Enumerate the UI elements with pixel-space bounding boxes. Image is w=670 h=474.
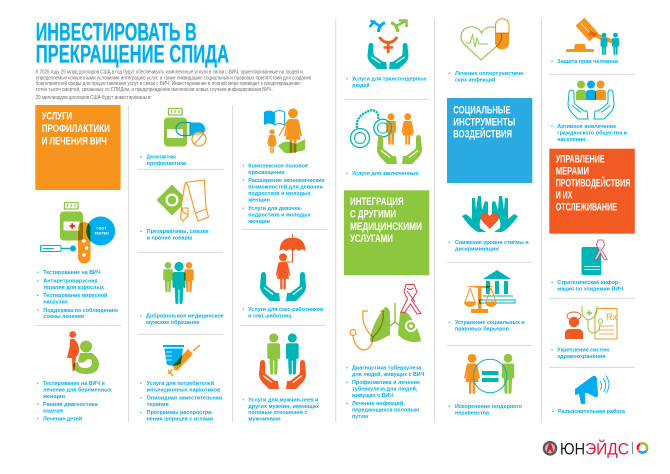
intro text: определяемые конкретными условиями интеграцию услуг, а также ликвидацию социальных и правовых препятствий для создания [36,74,312,81]
panel: integration with other health services heading: С ДРУГИМИ [350,208,396,220]
intro text [36,68,312,101]
title: ИНВЕСТИРОВАТЬ В [36,18,197,46]
panel: integration with other health services heading: УСЛУГАМИ [350,233,393,245]
intro text: благоприятной среды для предоставления услуг в связи с ВИЧ. Инвестирование в полной мере приведет к предотвращению [36,80,301,87]
icon: doctor, stethoscope and prescription [565,306,617,339]
list: transgender people [346,76,427,89]
list: people who inject drugs: Опиоидная заместительная [147,396,222,402]
list: civil society engagement [551,124,627,143]
list: pregnant women and children: лечение для беременных [43,386,112,393]
list: testing and treatment: Тестирование на ВИЧ [43,270,101,276]
list: tuberculosis and STI services: Диагностика туберкулеза [352,364,421,372]
list: opportunistic infections [449,71,525,84]
title [36,18,229,68]
list: civil society engagement: населения [557,137,585,143]
list: comprehensive sexuality education [243,164,325,225]
list: gender inequality: неравенства [455,410,489,416]
icon: two men and hands [259,333,306,389]
list: prisoners: Услуги для заключенных [352,171,419,177]
list: strategic information: Стратегическая инфор- [557,279,620,286]
list: pregnant women and children: женщин [42,394,65,400]
icon: hands holding heart [462,196,518,232]
list: testing and treatment [37,270,119,320]
list: voluntary male circumcision: мужское обрезание [146,319,200,326]
list: sex workers [243,306,323,320]
list: pregnant women and children: Тестирование на ВИЧ и [43,381,105,387]
list: tuberculosis and STI services: живущих с ВИЧ [351,393,393,399]
icon: cup and syringe [163,345,200,376]
list: gay men and other men who have sex with men: мужчинами [248,416,281,422]
panel: integration with other health services heading: МЕДИЦИНСКИМИ [350,221,422,233]
list: gay men and other men who have sex with men: Услуги для мужчин-геев и [248,398,318,404]
list: social and legal barriers: правовых барьеров [455,326,509,332]
icon: lungs, stethoscope and ribbon [350,284,421,350]
panel: social enablers heading: ИНСТРУМЕНТЫ [453,117,515,129]
list: testing and treatment: Поддержка по соблюдению [43,307,119,314]
list: tuberculosis and STI services: Профилактика и лечение [352,379,420,386]
panel: governance and monitoring heading: ПРОТИВОДЕЙСТВИЯ [556,177,630,190]
icon: gender equality [464,354,514,394]
list: sex workers: и секс-работниц [248,312,292,320]
list: gender inequality [449,404,522,416]
icon: book, woman and girl [264,108,305,153]
list: gay men and other men who have sex with men: других мужчин, имеющих [248,404,319,410]
list: tuberculosis and STI services [346,364,425,420]
list: tuberculosis and STI services: путем [352,414,368,420]
list: strategic information [551,279,623,292]
list: health systems: Укрепление систем [557,348,609,354]
panel: governance and monitoring heading [549,149,635,234]
panel: social enablers heading: СОЦИАЛЬНЫЕ [453,104,511,116]
icon: test kit and bottle [40,202,115,264]
list: comprehensive sexuality education: возможностей для девочек- [248,184,324,191]
list: comprehensive sexuality education: Расширение экономических [248,178,325,184]
panel: governance and monitoring heading: МЕРАМИ [556,166,589,178]
icon: community in open hands [568,80,614,119]
list: opportunistic infections: ских инфекций [455,76,495,84]
list: voluntary male circumcision: Добровольное медицинское [146,312,224,320]
list: pre-exposure prophylaxis: профилактика [147,160,186,167]
panel: governance and monitoring heading: ОТСЛЕЖИВАНИЕ [556,202,617,214]
title: ПРЕКРАЩЕНИЕ СПИДА [36,40,229,68]
list: people who inject drugs: Программы распростра- [147,410,213,416]
list: testing and treatment: Антиретровирусная [43,279,98,285]
list: pregnant women and children: Лечение детей [43,416,82,422]
list: pre-exposure prophylaxis: Доконтактная [147,154,176,160]
panel: prevention and treatment heading [35,105,121,190]
icon: test kit and bottle: I GOT [96,226,107,230]
icon: three men [163,262,194,304]
list: gay men and other men who have sex with men: половые отношения с [248,410,307,416]
list: comprehensive sexuality education: подростков и молодых [248,213,311,219]
panel: governance and monitoring heading: УПРАВЛЕНИЕ [556,154,605,166]
list: civil society engagement: Активное вовлечение [557,124,616,130]
intro text: К 2025 году 29 млрд долларов США в год будут обеспечивать комплексные услуги в связи с ВИЧ, ориентированные на людей и [36,68,303,76]
intro text: сотен тысяч смертей, связанных со СПИДом, и предупреждение миллионов новых случаев инфицирования ВИЧ. [36,86,273,93]
icon: umbrella, woman and hands [260,234,306,301]
list: tuberculosis and STI services: туберкулеза для людей, [352,386,418,392]
list: strategic information: мация по эпидемии ВИЧ [557,286,623,292]
panel: governance and monitoring heading: И ИХ [556,190,573,202]
icon: pregnant woman and breastfeeding mother [67,331,99,374]
icon: megaphone [575,376,609,404]
list: comprehensive sexuality education: Комплексное половое [248,164,308,170]
list: social and legal barriers: Устранение социальных и [455,320,525,326]
icon: book with ribbon [582,240,607,275]
list: civil society engagement: гражданского общества и [557,130,627,136]
list: people who inject drugs [140,380,222,422]
list: advocacy: Разъяснительная работа [558,408,625,415]
panel: social enablers heading: ВОЗДЕЙСТВИЯ [453,128,512,141]
list: condoms: Презервативы, смазки [147,229,209,235]
panel: integration with other health services heading: ИНТЕГРАЦИЯ [350,196,404,208]
list: gender inequality: Искоренение гендерного [455,404,522,410]
list: transgender people: людей [352,82,370,89]
list: comprehensive sexuality education: женщин [247,219,270,225]
logo: UNAIDS: ЮН [560,440,585,458]
list: comprehensive sexuality education: женщин [247,198,270,204]
list: testing and treatment: терапия для взрослых [43,285,104,291]
list: people who inject drugs: инъекционных наркотиков [147,387,220,393]
list: sex workers: Услуги для секс-работников [248,306,323,313]
icon: gavel and people [566,18,620,55]
list: health systems: здравоохранения [557,354,606,360]
logo: UNAIDS [543,439,647,458]
list: testing and treatment: схемы лечения [43,314,84,320]
list: comprehensive sexuality education: Услуги для девочек- [248,206,302,212]
list: testing and treatment: Тестирование вирусной [43,292,107,299]
list: voluntary male circumcision [140,312,224,326]
icon: test kit and bottle: TESTED [94,232,109,236]
list: people who inject drugs: терапия [147,402,169,408]
list: tuberculosis and STI services: передающихся половым [352,408,419,414]
list: pregnant women and children [37,381,112,422]
list: comprehensive sexuality education: просвещение [248,170,285,176]
list: opportunistic infections: Лечение оппортунистиче- [455,71,525,77]
icon: condom and lubricant tubes [156,180,208,221]
icon: pill bottle and capsule [164,108,206,146]
list: health systems [551,348,609,360]
list: stigma and discrimination: Снижение уровня стигмы и [455,240,529,246]
panel: integration with other health services heading [344,190,429,275]
list: condoms [140,229,209,242]
icon: doctor, stethoscope and prescription: Rx [606,312,617,322]
list: pregnant women and children: младенцев [43,408,63,414]
list: human rights: Защита прав человека [557,59,618,65]
intro text: 29 миллиардов долларов США будут инвестированы в: [36,95,152,101]
list: pregnant women and children: Ранняя диагностика [43,402,98,408]
icon: courthouse and scales [464,270,515,313]
list: stigma and discrimination [449,240,529,252]
list: transgender people: Услуги для трансгендерных [352,76,427,82]
list: tuberculosis and STI services: Лечение инфекций, [352,400,405,407]
list: tuberculosis and STI services: для людей, живущих с ВИЧ [352,371,425,378]
panel: prevention and treatment heading: ПРОФИЛАКТИКИ [42,123,110,135]
list: stigma and discrimination: дискриминации [455,246,499,252]
panel: prevention and treatment heading: УСЛУГИ [42,110,72,122]
list: condoms: и прочие товары [147,236,193,242]
list: gay men and other men who have sex with men [243,398,319,422]
icon: handcuffs, people and hands [350,110,422,164]
list: comprehensive sexuality education: подростков и молодых [248,191,311,197]
panel: social enablers heading [447,98,532,183]
list: testing and treatment: нагрузки [43,300,68,306]
icon: heart with capsule [461,19,509,60]
list: pre-exposure prophylaxis [140,154,186,167]
logo: UNAIDS: ЭЙДС [585,439,629,458]
list: social and legal barriers [449,320,525,332]
panel: prevention and treatment heading: И ЛЕЧЕНИЯ ВИЧ [42,136,107,148]
list: people who inject drugs: нения шприцев с иглами [147,416,213,422]
list: people who inject drugs: Услуги для потребителей [147,380,214,387]
icon: transgender symbol and hands [368,20,408,69]
